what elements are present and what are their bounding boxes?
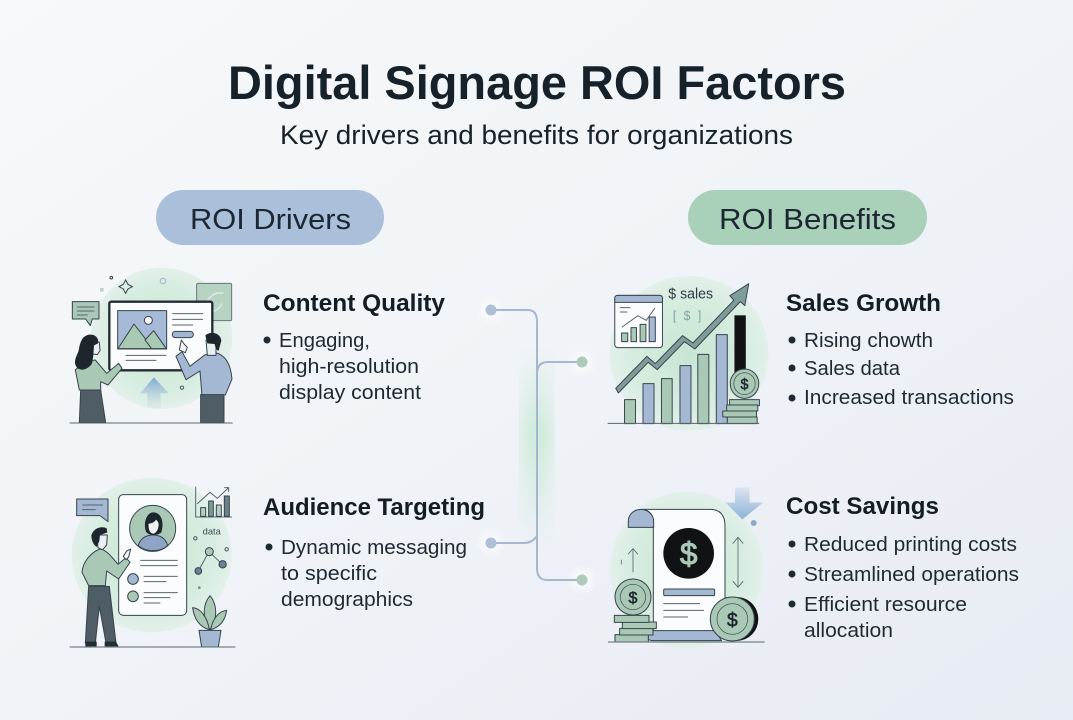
text block: Content Quality: display content: [279, 381, 421, 404]
icon: content quality illustration: [70, 268, 232, 423]
text block: Sales Growth: Increased transactions: [804, 386, 1014, 409]
icon: cost savings illustration: $: [727, 610, 738, 631]
text block: Cost Savings: Streamlined operations: [804, 563, 1019, 586]
icon: audience targeting illustration: [70, 478, 235, 647]
man figure: [176, 333, 232, 423]
icon: sales growth illustration: [608, 276, 769, 431]
icon: audience targeting illustration: data: [203, 527, 222, 537]
text block: Audience Targeting: Dynamic messaging: [281, 536, 467, 559]
icon: cost savings illustration: $: [629, 590, 638, 607]
text block: Audience Targeting: demographics: [281, 588, 413, 611]
text block: Cost Savings: allocation: [804, 619, 893, 642]
text block: Content Quality: high-resolution: [279, 355, 419, 378]
pill: ROI Benefits: ROI Benefits: [719, 204, 896, 236]
text block: Cost Savings: Cost Savings: [786, 493, 939, 520]
pill: ROI Drivers: [156, 190, 384, 245]
text block: Sales Growth: Sales data: [804, 357, 901, 380]
text block: Sales Growth: [786, 290, 1014, 409]
woman figure: [75, 335, 122, 423]
pill: ROI Drivers: ROI Drivers: [190, 204, 351, 236]
text block: Audience Targeting: [263, 494, 485, 611]
text block: Cost Savings: Reduced printing costs: [804, 533, 1017, 556]
text block: Cost Savings: Efficient resource: [804, 593, 967, 616]
connector lines: [475, 294, 598, 596]
icon: cost savings illustration: [608, 487, 764, 648]
text block: Audience Targeting: Audience Targeting: [263, 494, 485, 521]
icon: sales growth illustration: [ $ ]: [673, 309, 701, 323]
icon: sales growth illustration: $: [741, 377, 748, 393]
text block: Content Quality: Content Quality: [263, 290, 446, 317]
text block: Sales Growth: Rising chowth: [804, 329, 933, 352]
man figure: [82, 527, 131, 646]
pill: ROI Benefits: [688, 190, 927, 245]
text block: Content Quality: Engaging,: [279, 329, 370, 352]
text block: Audience Targeting: to specific: [281, 562, 377, 585]
title: Digital Signage ROI Factors: [228, 56, 846, 109]
text block: Cost Savings: [786, 493, 1019, 642]
text block: Sales Growth: Sales Growth: [786, 290, 941, 317]
icon: sales growth illustration: $ sales: [668, 285, 713, 301]
subtitle: Key drivers and benefits for organizations: [280, 120, 793, 150]
icon: cost savings illustration: $: [680, 537, 697, 572]
text block: Content Quality: [263, 290, 446, 404]
